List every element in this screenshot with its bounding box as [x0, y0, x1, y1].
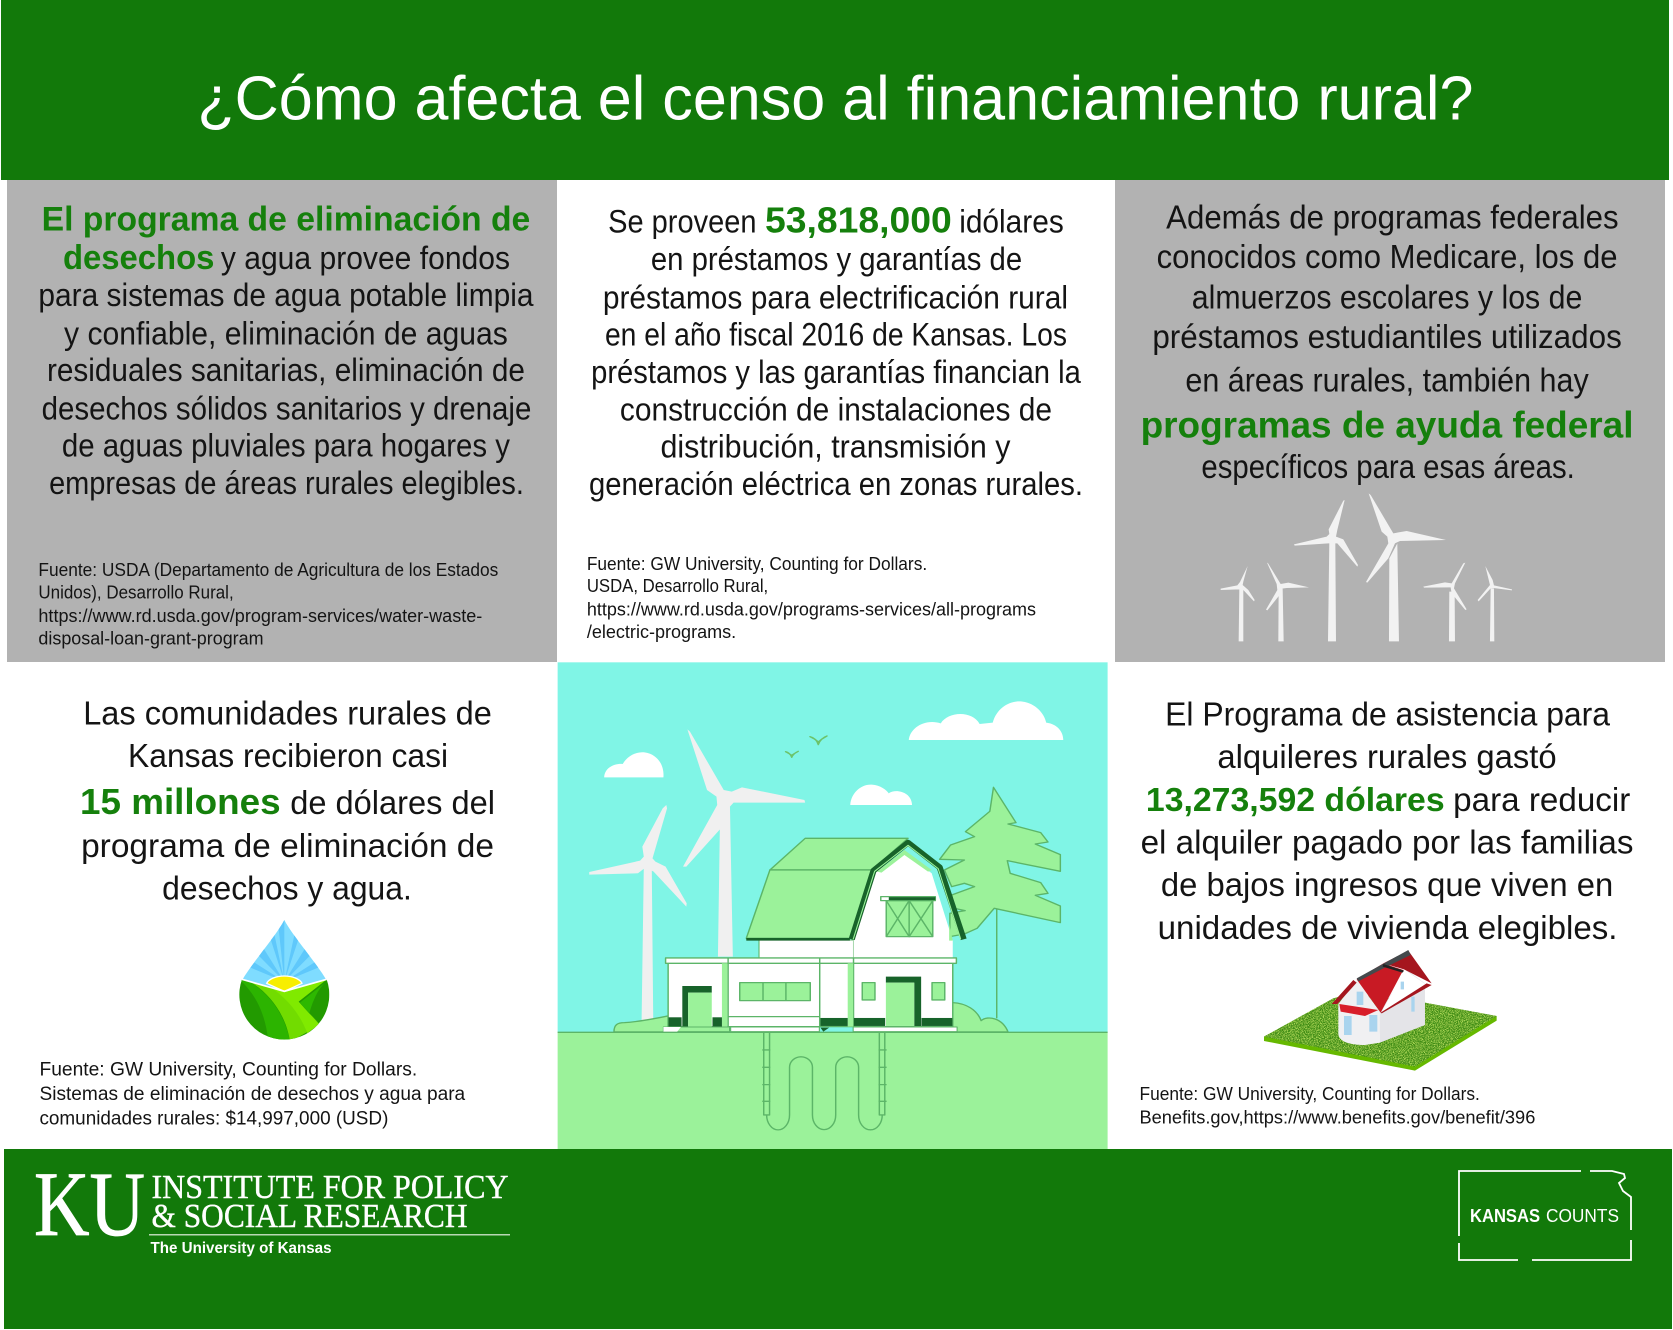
- dark base bands: [669, 1017, 952, 1027]
- text block: program description: de aguas pluviales para hogares y: [62, 428, 510, 464]
- text block: electrification loans: en el año fiscal 2016 de Kansas. Los: [605, 317, 1067, 353]
- sky: [558, 662, 1108, 1032]
- text block: rental assistance: para reducir: [1453, 782, 1630, 819]
- source text: Fuente: GW University, Counting for Dollars.: [1140, 1084, 1480, 1104]
- barn upper wall: [759, 940, 854, 958]
- text block: electrification loans: 53,818,000: [765, 200, 952, 241]
- text block: federal programs: programas de ayuda federal: [1141, 403, 1634, 445]
- logo: KU Institute for Policy & Social Research: INSTITUTE FOR POLICY: [152, 1169, 508, 1206]
- text block: program description: y confiable, eliminación de aguas: [64, 316, 508, 352]
- middle windows: [740, 983, 945, 1001]
- text block: 15 millones: programa de eliminación de: [81, 828, 494, 865]
- title: ¿Cómo afecta el censo al financiamiento rural?: [197, 64, 1473, 133]
- icon: house on grass lot: [1264, 950, 1497, 1071]
- illustration: farmhouse with wind turbines: [558, 662, 1108, 1149]
- text block: rental assistance: alquileres rurales gastó: [1217, 739, 1557, 776]
- text block: federal programs: específicos para esas áreas.: [1201, 449, 1575, 486]
- text block: federal programs: almuerzos escolares y los de: [1192, 279, 1582, 316]
- ground: [558, 1032, 1108, 1149]
- text block: electrification loans: distribución, transmisión y: [660, 429, 1010, 465]
- panel: rural electrification: [587, 200, 1083, 642]
- logo: KU Institute for Policy & Social Research: & SOCIAL RESEARCH: [152, 1198, 468, 1235]
- source text: [1140, 1084, 1535, 1128]
- text block: program description: [38, 200, 534, 501]
- text block: program description: El programa de eliminación de: [42, 200, 530, 238]
- text block: program description: para sistemas de agua potable limpia: [38, 277, 534, 313]
- left door: [682, 986, 712, 1027]
- logo: KU Institute for Policy & Social Research: [34, 1153, 510, 1257]
- source text: [38, 560, 498, 648]
- text block: federal programs: Además de programas federales: [1166, 199, 1619, 236]
- text block: 15 millones: desechos y agua.: [162, 870, 412, 907]
- underground geothermal pipes: [762, 1033, 887, 1130]
- source text: comunidades rurales: $14,997,000 (USD): [39, 1108, 388, 1130]
- header band: [1, 0, 1669, 180]
- text block: program description: desechos sólidos sanitarios y drenaje: [42, 390, 531, 426]
- text block: electrification loans: préstamos y las garantías financian la: [591, 354, 1081, 390]
- text block: rental assistance: [1141, 697, 1634, 947]
- logo: Kansas Counts: COUNTS: [1546, 1205, 1619, 1226]
- text block: 15 millones: Kansas recibieron casi: [128, 738, 448, 775]
- source text: USDA, Desarrollo Rural,: [587, 576, 768, 596]
- text block: rental assistance: unidades de vivienda elegibles.: [1158, 910, 1618, 947]
- source text: https://www.rd.usda.gov/program-services/water-waste-: [38, 606, 482, 626]
- panel: rental assistance: [1140, 697, 1634, 1128]
- text block: program description: residuales sanitarias, eliminación de: [47, 352, 525, 388]
- text block: 15 millones: 15 millones: [80, 781, 281, 822]
- tree: [940, 787, 1060, 1018]
- source text: Unidos), Desarrollo Rural,: [38, 583, 234, 603]
- source text: Sistemas de eliminación de desechos y agua para: [39, 1083, 465, 1105]
- panel: water and waste disposal program: [7, 180, 557, 662]
- panel: federal aid programs: [1115, 180, 1665, 662]
- logo: KU Institute for Policy & Social Research: KU: [34, 1153, 145, 1255]
- clouds: [604, 701, 1063, 805]
- text block: electrification loans: [589, 200, 1083, 502]
- text block: federal programs: [1141, 199, 1634, 486]
- source text: Benefits.gov,https://www.benefits.gov/benefit/396: [1140, 1108, 1535, 1128]
- text block: rental assistance: 13,273,592 dólares: [1146, 782, 1445, 819]
- text block: rental assistance: El Programa de asistencia para: [1165, 697, 1611, 734]
- icon: water drop with fields and sun: [238, 917, 332, 1042]
- icon: row of wind turbines: [1221, 493, 1512, 641]
- source text: Fuente: GW University, Counting for Dollars.: [587, 554, 927, 574]
- text block: rental assistance: el alquiler pagado por las familias: [1141, 825, 1634, 862]
- text block: program description: y agua provee fondos: [221, 240, 510, 276]
- source text: Fuente: GW University, Counting for Dollars.: [39, 1058, 417, 1080]
- text block: electrification loans: generación eléctrica en zonas rurales.: [589, 466, 1083, 502]
- text block: program description: empresas de áreas rurales elegibles.: [49, 465, 524, 501]
- right door: [886, 977, 921, 1026]
- bushes: [953, 1003, 1008, 1032]
- source text: https://www.rd.usda.gov/programs-services/all-programs: [587, 600, 1036, 620]
- source text: [39, 1058, 465, 1130]
- barn roof: [770, 838, 908, 870]
- barn window: [881, 897, 935, 937]
- source text: disposal-loan-grant-program: [38, 628, 264, 648]
- foundation: [663, 1027, 957, 1032]
- text block: 15 millones: de dólares del: [290, 785, 495, 822]
- text block: electrification loans: préstamos para electrificación rural: [603, 279, 1068, 315]
- logo: Kansas Counts: [1459, 1171, 1631, 1260]
- panel: water funding figure: [39, 695, 495, 1130]
- house walls: [666, 958, 956, 1027]
- text block: federal programs: préstamos estudiantiles utilizados: [1152, 319, 1622, 356]
- logo: Kansas Counts: KANSAS: [1470, 1205, 1540, 1226]
- wind turbines: [589, 729, 805, 1020]
- text block: electrification loans: en préstamos y garantías de: [651, 241, 1022, 277]
- text block: federal programs: en áreas rurales, también hay: [1185, 363, 1589, 400]
- text block: 15 millones: Las comunidades rurales de: [83, 695, 492, 732]
- footer band: [4, 1149, 1672, 1329]
- text block: electrification loans: Se proveen: [608, 204, 756, 240]
- source text: [587, 554, 1036, 642]
- text block: electrification loans: construcción de instalaciones de: [620, 391, 1052, 427]
- text block: federal programs: conocidos como Medicare, los de: [1157, 239, 1618, 276]
- text block: rental assistance: de bajos ingresos que viven en: [1161, 867, 1613, 904]
- source text: /electric-programs.: [587, 622, 736, 642]
- logo: KU Institute for Policy & Social Research: The University of Kansas: [150, 1240, 332, 1257]
- text block: electrification loans: idólares: [959, 204, 1064, 240]
- source text: Fuente: USDA (Departamento de Agricultura de los Estados: [38, 560, 498, 580]
- text block: program description: desechos: [63, 239, 214, 277]
- text block: 15 millones: [80, 695, 495, 907]
- birds: [786, 736, 827, 757]
